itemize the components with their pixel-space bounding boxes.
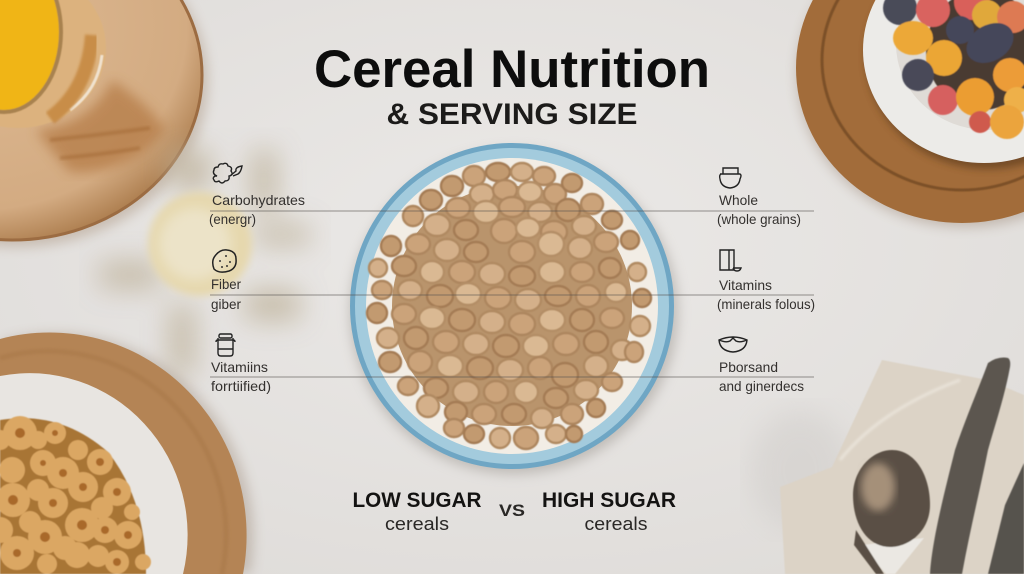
- knife: [930, 358, 1010, 574]
- icon: fiber cookie: [213, 250, 236, 272]
- label: whole: Whole: [719, 192, 758, 208]
- right callouts: (minerals folous): [717, 296, 815, 312]
- label: vitamins minerals: Vitamins: [719, 277, 772, 293]
- low sugar label: cereals: [385, 514, 449, 534]
- icon: vitamin jar: [216, 334, 235, 356]
- label: carbohydrates: Carbohydrates: [212, 192, 305, 208]
- comparison: low vs high sugar: [352, 489, 676, 534]
- high sugar label: [542, 489, 676, 534]
- right callouts: and ginerdecs: [719, 378, 804, 394]
- cereal balls: [883, 0, 1024, 139]
- subtitle: & SERVING SIZE: [386, 98, 638, 131]
- decoration: bottom-left board with ring cereal plate: [0, 332, 253, 574]
- spoon: [853, 450, 930, 574]
- left callouts: [209, 163, 305, 394]
- ring cereal: [0, 416, 151, 574]
- icon: portion bowl: [719, 337, 747, 352]
- callout lines: [210, 211, 814, 377]
- right callouts: (whole grains): [717, 211, 801, 227]
- icon: vitamins box: [720, 250, 741, 271]
- low sugar label: LOW SUGAR: [352, 489, 482, 512]
- title: Cereal Nutrition: [314, 40, 710, 99]
- left callouts: (energr): [209, 211, 256, 227]
- cereal flakes: [367, 163, 651, 449]
- high sugar label: HIGH SUGAR: [542, 489, 676, 512]
- label: vitamins: Vitamiins: [211, 359, 268, 375]
- low sugar label: [352, 489, 482, 534]
- right callouts: [717, 168, 815, 394]
- decoration: napkin and cutlery: [750, 358, 1024, 574]
- icon: whole grain bowl: [720, 168, 741, 188]
- title: [314, 40, 710, 131]
- cereal bowl: [350, 143, 678, 474]
- left callouts: giber: [211, 296, 241, 312]
- high sugar label: cereals: [584, 514, 648, 534]
- versus label: VS: [499, 501, 525, 520]
- decoration: top-left board with juice glass: [0, 0, 208, 247]
- decoration: blurred glass glow: [100, 150, 310, 375]
- left callouts: forrtiified): [211, 378, 271, 394]
- decoration: top-right board with colourful cereal bowl: [796, 0, 1024, 227]
- label: portions: Pborsand: [719, 359, 778, 375]
- icon: grain cluster: [213, 163, 242, 183]
- label: fiber: Fiber: [211, 276, 241, 292]
- fork: [988, 463, 1024, 574]
